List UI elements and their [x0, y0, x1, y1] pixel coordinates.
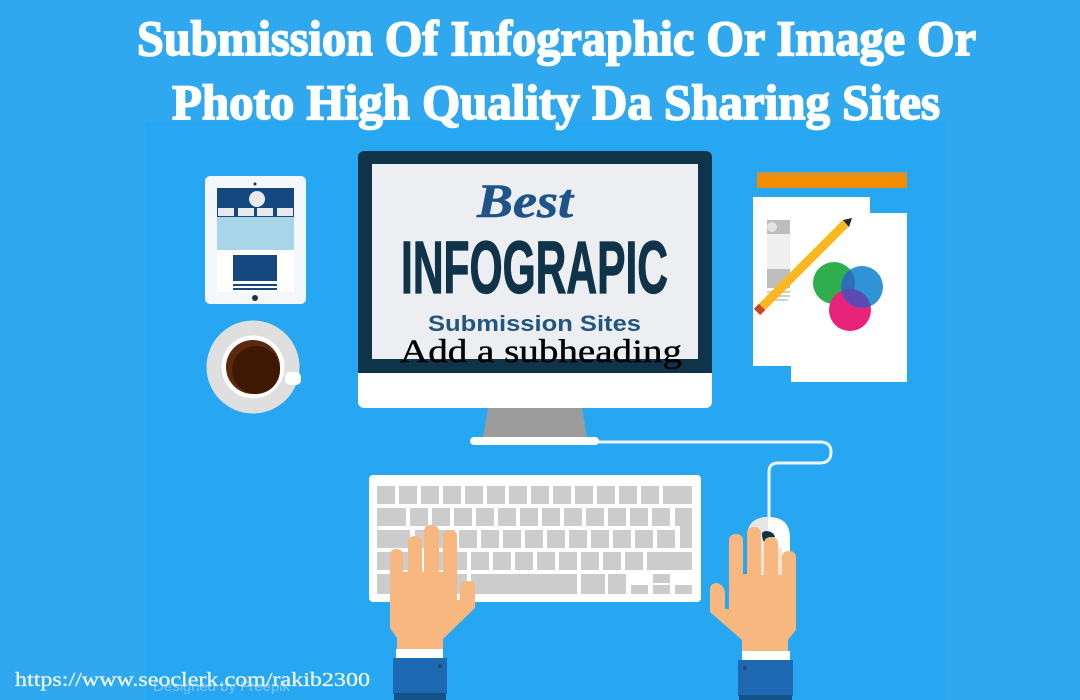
title: Photo High Quality Da Sharing Sites: [172, 74, 940, 130]
keyboard: [369, 475, 701, 602]
subheading: Add a subheading: [400, 334, 682, 370]
screen text: Best: Best: [476, 175, 575, 228]
colour circles: [813, 262, 883, 331]
left hand on keyboard: [390, 525, 475, 700]
icon: design papers with pencil: [753, 197, 907, 382]
footer credit (faint): Designed by Freepik: [153, 678, 291, 694]
footer url: https://www.seoclerk.com/rakib2300: [15, 669, 370, 691]
monitor stand: [483, 408, 587, 437]
icon: tablet: [205, 176, 306, 304]
title: Submission Of Infographic Or Image Or: [137, 10, 976, 66]
mouse: [747, 517, 790, 570]
icon: coffee cup: [206, 320, 301, 414]
pencil: [757, 218, 852, 312]
screen text: INFOGRAPIC: INFOGRAPIC: [401, 226, 668, 309]
mouse cord: [598, 442, 831, 519]
right hand on mouse: [710, 517, 796, 700]
monitor: [358, 151, 831, 519]
icon: ruler: [757, 172, 907, 188]
title: [137, 10, 976, 130]
screen text: Submission Sites: Submission Sites: [428, 311, 641, 336]
